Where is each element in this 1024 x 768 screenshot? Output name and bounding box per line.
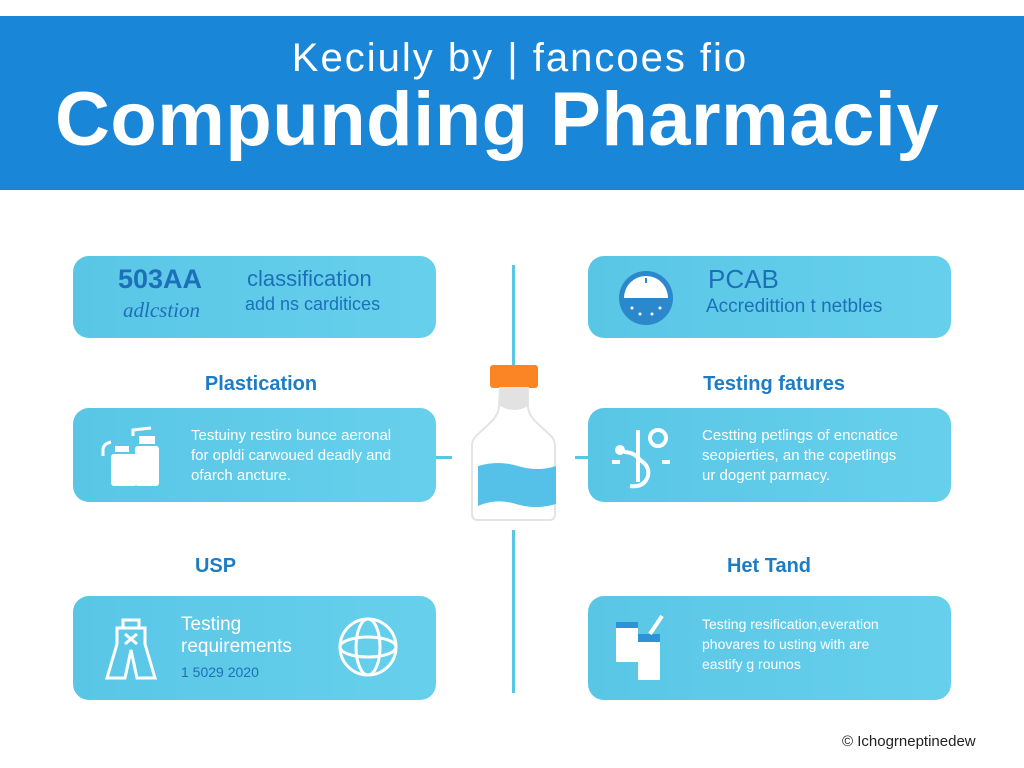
panel: Testing fatures: seopierties, an the copetlings (702, 447, 896, 464)
panel: USP: requirements (181, 636, 292, 657)
panel: USP: Testing (181, 614, 241, 635)
heading: Het Tand: Het Tand (727, 555, 811, 577)
panel: USP (73, 596, 436, 700)
panel: Het Tand (588, 596, 951, 700)
panel: 503AA: 503AA (118, 264, 202, 294)
icon: containers (102, 426, 159, 486)
title: Compunding Pharmaciy (55, 77, 939, 162)
panel: Testing fatures: Cestting petlings of encnatice (702, 427, 898, 444)
panel: Het Tand: Testing resification,everation (702, 616, 879, 632)
icon: instrument (612, 428, 670, 488)
icon: bottle (471, 365, 556, 521)
panel: Testing fatures: ur dogent parmacy. (702, 467, 830, 484)
panel: Plastication: ofarch ancture. (191, 467, 291, 484)
center vertical line top (512, 265, 515, 380)
heading: Testing fatures: Testing fatures (703, 373, 845, 395)
panel: USP: 1 5029 2020 (181, 664, 259, 680)
heading: Plastication: Plastication (205, 373, 317, 395)
footer credit: © Ichogrneptinedew (842, 733, 976, 750)
panel: Het Tand: phovares to usting with are (702, 636, 869, 652)
panel: PCAB: PCAB (708, 264, 779, 294)
icon: jars (616, 614, 664, 680)
icon: lab coat (105, 618, 157, 680)
panel: Het Tand: eastify g rounos (702, 656, 801, 672)
connector left (436, 456, 452, 459)
center vertical line bottom (512, 530, 515, 693)
panel: 503AA: classification (247, 266, 372, 291)
heading: USP: USP (195, 555, 236, 577)
connector right (575, 456, 589, 459)
panel: PCAB (588, 256, 951, 338)
subtitle: Keciuly by | fancoes fio (292, 36, 748, 80)
panel: 503AA: adlcstion (123, 298, 200, 322)
panel: Testing fatures (588, 408, 951, 502)
header banner (0, 16, 1024, 190)
icon: globe (338, 618, 398, 676)
icon: gauge (619, 271, 673, 325)
panel: 503AA: add ns carditices (245, 294, 380, 314)
panel: 503AA (73, 256, 436, 338)
panel: PCAB: Accredittion t netbles (706, 296, 882, 317)
panel: Plastication (73, 408, 436, 502)
panel: Plastication: Testuiny restiro bunce aeronal (191, 427, 391, 444)
panel: Plastication: for opldi carwoued deadly and (191, 447, 391, 464)
